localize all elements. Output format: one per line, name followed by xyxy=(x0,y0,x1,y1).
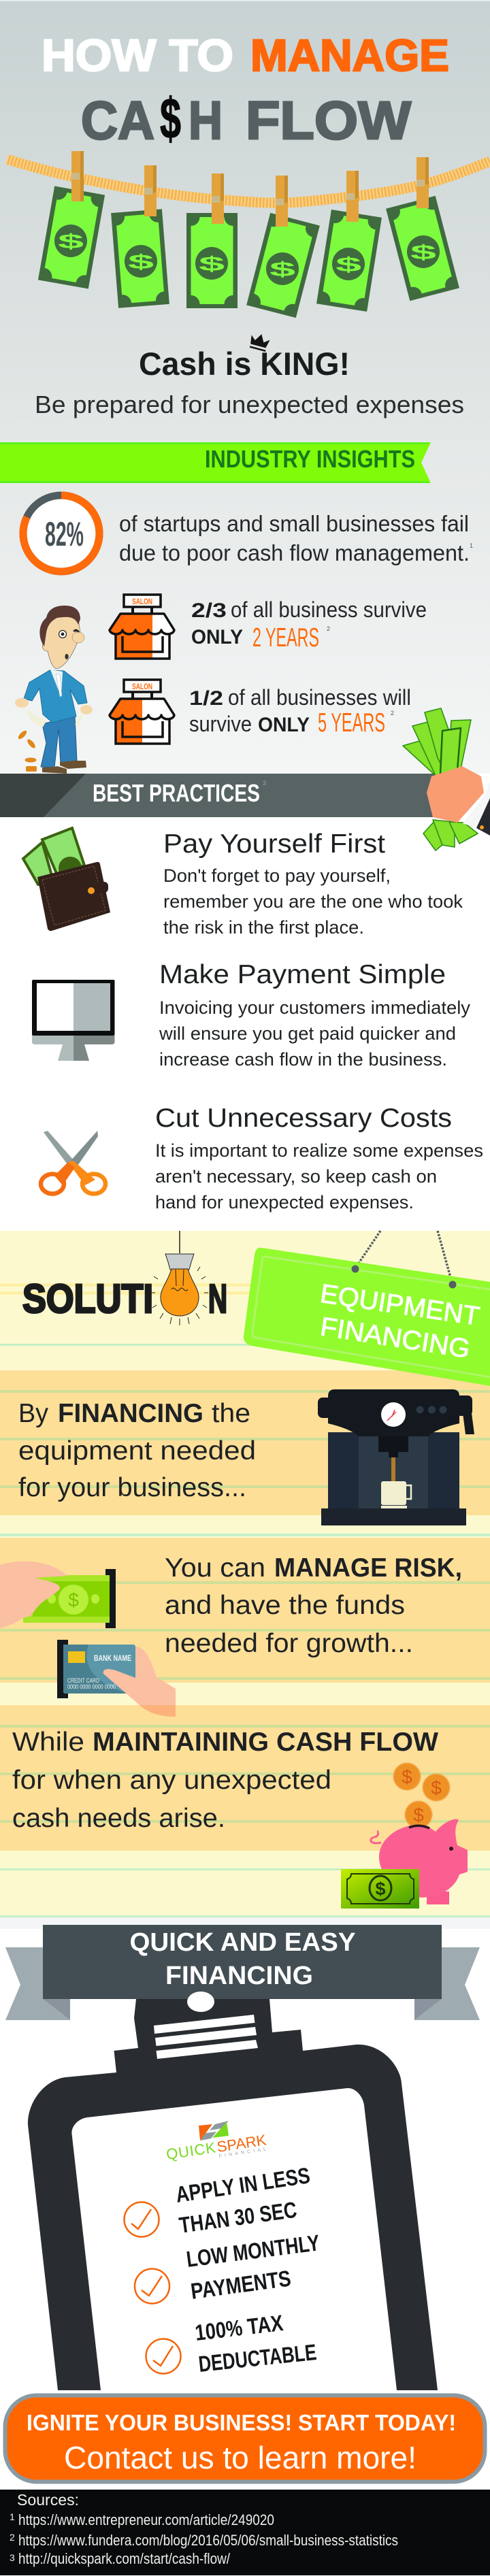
bill 1 xyxy=(38,186,105,288)
text: maintaining cash flow: While xyxy=(12,1728,84,1757)
text: two thirds survive two years: 2 xyxy=(327,625,330,632)
text: manage risk: and have the funds xyxy=(165,1591,405,1620)
checklist: DEDUCTABLE xyxy=(197,2339,318,2377)
text: by financing the equipment: By xyxy=(18,1399,48,1428)
checklist xyxy=(124,2162,321,2377)
text: one half survive five years: 5 YEARS xyxy=(318,708,385,738)
illustration: hand inserting credit card xyxy=(57,1640,176,1717)
text: one half survive five years: 2 xyxy=(391,710,394,716)
text: two thirds survive two years: 2 YEARS xyxy=(252,623,319,653)
piggy body xyxy=(371,1819,468,1904)
checklist: LOW MONTHLY xyxy=(185,2230,321,2272)
title: how to manage cash flow xyxy=(42,30,449,150)
chart: 82 percent ring: 82% xyxy=(45,515,84,553)
logo: quickspark financial: FINANCIAL xyxy=(218,2147,267,2159)
ribbon: quick and easy financing xyxy=(5,1925,480,2020)
text: one half survive five years: ONLY xyxy=(258,714,310,736)
text: cut unnecessary costs: It is important to realize some expenses xyxy=(155,1140,483,1161)
clipboard xyxy=(28,1992,438,2390)
coins xyxy=(393,1763,450,1828)
text: by financing the equipment xyxy=(18,1399,256,1502)
illustration: hand inserting cash: $ xyxy=(68,1589,79,1611)
icon: wallet xyxy=(23,828,110,931)
heading: solution with light bulb: SOLUTI xyxy=(22,1276,153,1321)
call to action: IGNITE YOUR BUSINESS! START TODAY! xyxy=(27,2410,456,2435)
checklist: 100% TAX xyxy=(193,2310,284,2345)
text: one half survive five years: survive xyxy=(189,712,252,736)
title: how to manage cash flow: CA xyxy=(81,90,154,150)
text: maintaining cash flow xyxy=(12,1728,438,1833)
sign: equipment financing: FINANCING xyxy=(318,1312,472,1364)
text: one half survive five years: of all businesses will xyxy=(228,685,411,710)
bill 6 xyxy=(386,196,459,301)
text: maintaining cash flow: MAINTAINING CASH FLOW xyxy=(93,1728,438,1757)
practice: make payment simple xyxy=(32,960,471,1070)
title: how to manage cash flow: $ xyxy=(160,86,181,150)
bill 2: $ xyxy=(128,251,154,274)
icon: monitor xyxy=(32,980,114,1061)
icon: crown xyxy=(248,332,271,352)
text: make payment simple: Invoicing your customers immediately xyxy=(159,997,471,1018)
title: how to manage cash flow: FLOW xyxy=(246,90,411,150)
text: cut unnecessary costs xyxy=(155,1104,483,1212)
text: maintaining cash flow: for when any unexpected xyxy=(12,1766,331,1795)
text: cut unnecessary costs: hand for unexpected expenses. xyxy=(155,1192,414,1212)
illustration: hand inserting credit card: BANK NAME xyxy=(94,1653,131,1663)
dollar bill: $ xyxy=(375,1879,386,1899)
logo: quickspark financial: QUICK xyxy=(165,2139,217,2163)
check icons xyxy=(124,2202,181,2373)
ribbon heading text: QUICK AND EASY xyxy=(129,1928,355,1957)
title: how to manage cash flow: HOW TO xyxy=(42,30,233,80)
icon: shop one half xyxy=(110,680,174,744)
bill 3: $ xyxy=(199,253,225,276)
text: pay yourself first: remember you are the one who took xyxy=(163,891,463,912)
text: by financing the equipment: equipment needed xyxy=(18,1436,256,1466)
text: two thirds survive two years xyxy=(191,597,427,653)
bill 5: $ xyxy=(336,254,362,276)
text: pay yourself first xyxy=(163,829,463,938)
heading: cash is king: Cash is KING! xyxy=(139,346,350,382)
illustration: hand holding cash xyxy=(403,708,490,851)
checklist: THAN 30 SEC xyxy=(178,2197,298,2238)
bill 4 xyxy=(246,213,320,318)
text: pay yourself first: Pay Yourself First xyxy=(163,829,385,859)
dollar bill xyxy=(341,1869,419,1909)
logo: quickspark financial xyxy=(165,2121,267,2163)
icon: shop two thirds xyxy=(110,595,174,659)
icon: light bulb xyxy=(151,1231,208,1325)
text: one half survive five years: 1/2 xyxy=(189,687,223,710)
call to action xyxy=(5,2395,485,2482)
title: how to manage cash flow: MANAGE xyxy=(250,30,449,80)
title: how to manage cash flow: H xyxy=(189,90,223,150)
footer: sources: http://quickspark.com/start/cash-flow/ xyxy=(18,2550,231,2567)
checklist: APPLY IN LESS xyxy=(174,2162,312,2207)
call to action: Contact us to learn more! xyxy=(64,2440,416,2475)
bill 4: $ xyxy=(270,259,296,281)
text: startups statistic: 1 xyxy=(470,542,473,549)
bill 5 xyxy=(316,210,382,312)
text: make payment simple: increase cash flow in the business. xyxy=(159,1049,447,1070)
banner: industry insights: INDUSTRY INSIGHTS xyxy=(205,445,415,473)
text: maintaining cash flow: cash needs arise. xyxy=(12,1804,225,1833)
bill 1: $ xyxy=(58,231,84,253)
text: two thirds survive two years: of all business survive xyxy=(231,597,427,622)
illustration: hand inserting cash xyxy=(0,1562,116,1628)
text: make payment simple: will ensure you get paid quicker and xyxy=(159,1023,456,1044)
banner: best practices: BEST PRACTICES xyxy=(93,779,260,807)
subheading: Be prepared for unexpected expenses xyxy=(35,391,464,418)
text: manage risk: MANAGE RISK, xyxy=(274,1553,462,1583)
text: startups statistic xyxy=(119,511,473,565)
text: cut unnecessary costs: Cut Unnecessary Costs xyxy=(155,1104,452,1133)
illustration: piggy bank with coins xyxy=(341,1763,468,1909)
footer: sources: 2 xyxy=(10,2532,15,2543)
logo: quickspark financial: SPARK xyxy=(216,2131,267,2156)
chart: 82 percent ring xyxy=(23,495,99,572)
footer: sources xyxy=(0,2490,490,2575)
illustration: hand inserting credit card: CREDIT CARD xyxy=(67,1677,99,1685)
footer: sources: 3 xyxy=(10,2552,15,2563)
footer: sources: https://www.fundera.com/blog/2016/05/06/small-business-statistics xyxy=(18,2532,398,2549)
text: manage risk xyxy=(165,1553,462,1658)
clothes pegs xyxy=(71,151,429,227)
text: pay yourself first: Don't forget to pay yourself, xyxy=(163,865,391,886)
clothesline rope with hanging money xyxy=(7,151,490,318)
text: by financing the equipment: FINANCING xyxy=(58,1399,203,1428)
icon: scissors xyxy=(41,1131,105,1193)
heading: solution with light bulb xyxy=(22,1231,227,1325)
text: manage risk: needed for growth... xyxy=(165,1629,413,1658)
checklist: PAYMENTS xyxy=(189,2265,293,2304)
coins falling xyxy=(17,729,37,772)
icon: shop two thirds: SALON xyxy=(132,597,152,606)
text: startups statistic: of startups and small businesses fail xyxy=(119,511,469,536)
practice: pay yourself first xyxy=(23,828,463,938)
bill 3 xyxy=(186,213,238,308)
text: cut unnecessary costs: aren't necessary, so keep cash on xyxy=(155,1166,437,1187)
panel: solution background xyxy=(0,1231,490,1929)
text: by financing the equipment: for your business... xyxy=(18,1473,246,1502)
banner: best practices xyxy=(0,774,436,817)
footer: sources: https://www.entrepreneur.com/article/249020 xyxy=(18,2511,274,2528)
text: one half survive five years xyxy=(189,685,411,738)
practice: cut unnecessary costs xyxy=(41,1104,483,1212)
text: pay yourself first: the risk in the first place. xyxy=(163,917,364,938)
illustration: espresso machine xyxy=(318,1389,474,1525)
footer: sources: 1 xyxy=(10,2511,15,2522)
illustration: hand inserting credit card: 0000 0000 0000 0000 xyxy=(67,1683,116,1691)
sign: equipment financing: EQUIPMENT xyxy=(318,1279,481,1332)
ribbon heading text xyxy=(129,1928,355,1990)
bill 2 xyxy=(111,209,169,308)
coins: $ xyxy=(431,1777,442,1798)
sign: equipment financing xyxy=(244,1231,490,1386)
footer: sources: Sources: xyxy=(17,2491,79,2509)
bill 6: $ xyxy=(410,242,437,264)
text: make payment simple: Make Payment Simple xyxy=(159,960,446,989)
illustration: man with empty pockets xyxy=(15,606,93,774)
text: two thirds survive two years: ONLY xyxy=(191,626,243,648)
text: manage risk: You can xyxy=(165,1553,265,1583)
banner: best practices: 3 xyxy=(263,780,266,787)
banner: industry insights xyxy=(0,442,431,483)
heading: solution with light bulb: N xyxy=(208,1276,227,1321)
coins: $ xyxy=(402,1766,412,1787)
icon: shop one half: SALON xyxy=(132,682,152,691)
ribbon heading text: FINANCING xyxy=(165,1962,313,1990)
text: startups statistic: due to poor cash flow management. xyxy=(119,540,470,565)
coins: $ xyxy=(413,1804,424,1826)
text: two thirds survive two years: 2/3 xyxy=(191,599,227,622)
text: by financing the equipment: the xyxy=(212,1399,250,1428)
text: make payment simple xyxy=(159,960,471,1070)
